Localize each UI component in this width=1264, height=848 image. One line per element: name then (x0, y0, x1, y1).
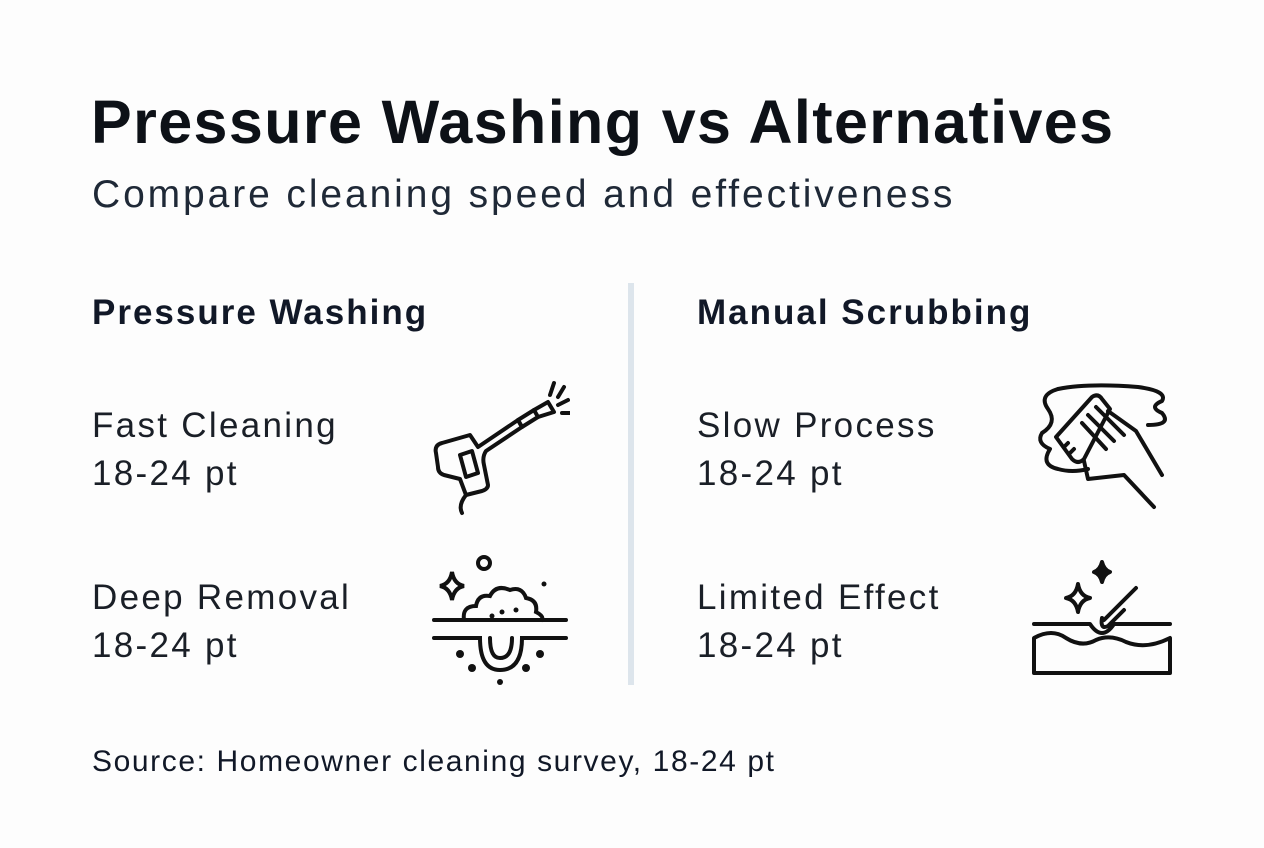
text block: limited effect: Limited Effect (697, 578, 941, 617)
title: Pressure Washing vs Alternatives (91, 88, 1114, 156)
source note: Source: Homeowner cleaning survey, 18-24 pt (92, 745, 776, 778)
icon: hand scrubbing (1038, 383, 1167, 510)
panel: manual scrubbing (697, 293, 1172, 675)
heading: manual scrubbing: Manual Scrubbing (697, 293, 1032, 332)
heading: pressure washing: Pressure Washing (92, 293, 428, 332)
icon: limited effect (1032, 560, 1172, 675)
icon: deep removal (432, 555, 568, 685)
panel: pressure washing (92, 293, 570, 685)
divider (628, 283, 634, 685)
text block: fast cleaning (92, 406, 338, 493)
subtitle: Compare cleaning speed and effectiveness (92, 173, 955, 216)
text block: deep removal (92, 578, 351, 665)
text block: deep removal: 18-24 pt (92, 626, 239, 665)
text block: fast cleaning: Fast Cleaning (92, 406, 338, 445)
text block: limited effect (697, 578, 941, 665)
text block: fast cleaning: 18-24 pt (92, 454, 239, 493)
text block: deep removal: Deep Removal (92, 578, 351, 617)
icon: pressure washer (434, 381, 570, 516)
text block: slow process: 18-24 pt (697, 454, 844, 493)
text block: slow process (697, 406, 937, 493)
text block: slow process: Slow Process (697, 406, 937, 445)
text block: limited effect: 18-24 pt (697, 626, 844, 665)
